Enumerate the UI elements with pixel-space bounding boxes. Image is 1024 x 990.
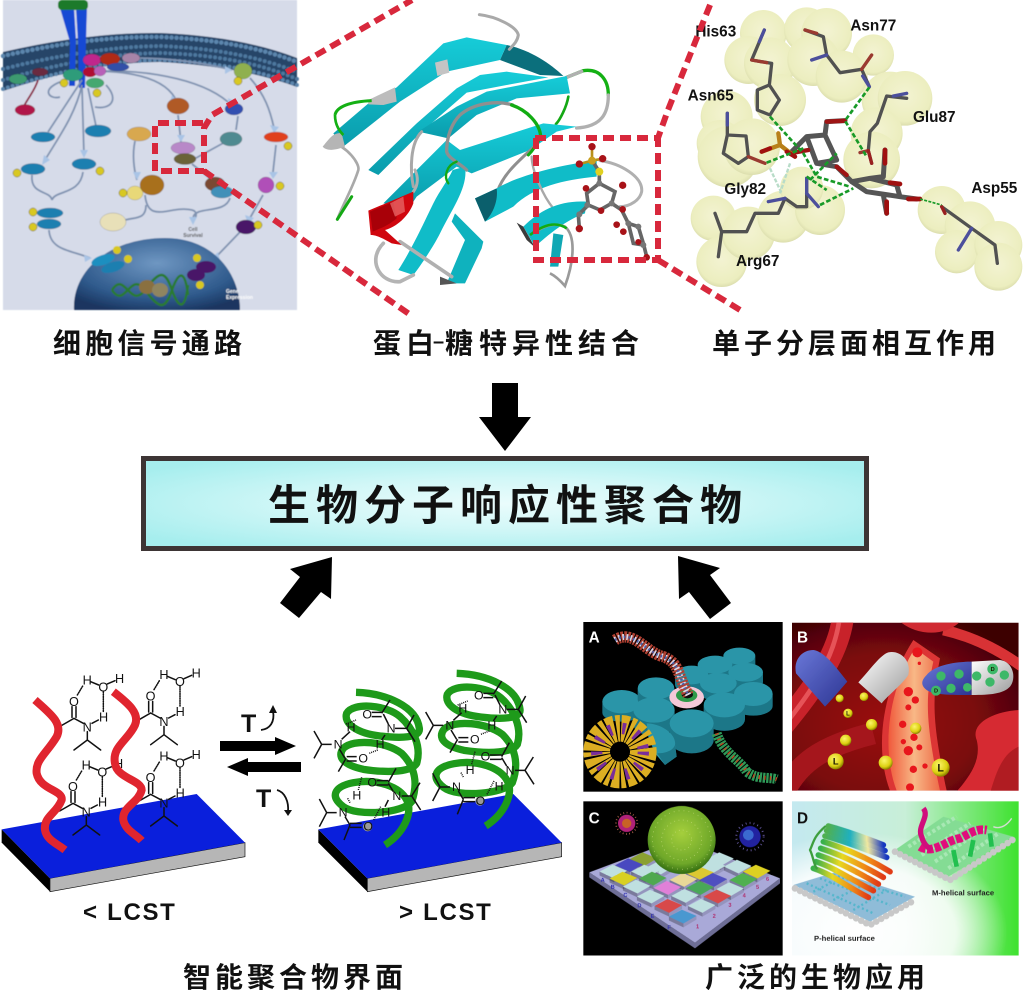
sub-panel C: microarray: B	[611, 885, 615, 891]
helix chemical groups: N	[339, 806, 348, 820]
hydrated chemical groups: H	[159, 749, 168, 763]
connector: pathway to protein magnification	[155, 0, 745, 316]
helix 2 lower chemical groups: H	[495, 780, 504, 794]
beta strand B	[368, 72, 548, 175]
hydrated chemical groups: H	[192, 748, 201, 762]
beta strand D	[383, 123, 577, 207]
sub-panel D: helical surfaces	[792, 801, 1019, 955]
title box: 生物分子响应性聚合物	[268, 482, 748, 529]
hydrated chemical groups: H	[98, 795, 107, 809]
caption: protein sugar binding: 蛋白	[373, 328, 434, 359]
sub-panel C: microarray: D	[637, 903, 641, 909]
residue labels: Asp55	[971, 180, 1018, 197]
caption: protein sugar binding: –	[433, 331, 444, 353]
hydrated chemical groups: O	[98, 680, 108, 694]
sub-panel C: microarray: 5	[756, 885, 759, 891]
green helix chains	[335, 673, 520, 845]
hydrated chemical groups: H	[176, 786, 185, 800]
hydrated chemical groups: H	[99, 710, 108, 724]
sub-panel B: capsule drug delivery: B	[797, 630, 808, 647]
sub-panel C: microarray: 6	[766, 877, 769, 883]
pale contacts	[770, 163, 790, 193]
cell membrane	[3, 33, 297, 91]
hydrated chemical groups: N	[83, 720, 92, 734]
helix 1 terminal oxygen: O	[363, 820, 373, 834]
panel: protein-sugar binding ribbon	[323, 15, 650, 286]
P-helical surface	[793, 826, 915, 925]
sub-panel D: helical surfaces: M-helical surface	[932, 888, 994, 897]
equilibrium arrows	[220, 705, 301, 816]
sub-panel C: microarray	[583, 801, 783, 955]
hydrated chemical groups: H	[115, 672, 124, 686]
sub-panel C: microarray: E	[651, 914, 655, 920]
arrow: up right into title	[280, 557, 332, 618]
hydrated chemical groups: H	[159, 668, 168, 682]
sub-panel B: capsule drug delivery: D	[934, 689, 938, 695]
substrate	[318, 794, 562, 892]
equilibrium arrows: T	[256, 785, 271, 813]
panel: smart polymer below LCST	[2, 667, 245, 892]
label: cell survival: Survival	[183, 233, 203, 239]
sugar ligand	[762, 121, 920, 213]
receptor	[58, 0, 88, 88]
label: above LCST: > LCST	[399, 899, 493, 926]
beta strand A	[323, 37, 507, 150]
sub-panel B: capsule drug delivery: L	[833, 757, 839, 767]
sub-panel C: microarray: 2	[713, 914, 716, 920]
helix 2 lower chemical groups: O	[476, 794, 485, 808]
label: cell survival: Cell	[188, 227, 198, 233]
ligand atoms	[576, 143, 650, 261]
label: gene expression: Gene	[226, 289, 239, 295]
helix 2 chemical groups: N	[498, 702, 507, 716]
helix chemical groups: H	[376, 737, 385, 751]
equilibrium arrows: T	[241, 710, 256, 738]
arrowheads	[42, 66, 279, 262]
helix 2 chemical groups	[426, 681, 527, 753]
nucleus	[74, 238, 240, 310]
helix 2 chemical groups: O	[474, 688, 484, 702]
beta strand F	[447, 213, 483, 283]
helix chemical groups: N	[387, 721, 396, 735]
residue labels: Asn77	[850, 17, 896, 34]
helix 2 lower chemical groups	[433, 743, 534, 814]
gray tail	[532, 157, 642, 208]
panel: smart polymer above LCST	[314, 673, 562, 892]
caption: monolayer interaction: 单子分层面相互作用	[712, 328, 1000, 359]
ligand sticks	[578, 160, 647, 257]
residue labels: Arg67	[736, 253, 779, 270]
hydrated chemical groups: H	[176, 705, 185, 719]
M-helical surface	[895, 808, 1015, 880]
panel: cell signaling pathway	[3, 0, 297, 310]
label: below LCST: < LCST	[83, 899, 177, 926]
helix 2 chemical groups: H	[487, 718, 496, 732]
panel: monolayer interaction	[688, 7, 1022, 291]
sub-panel C: microarray: 1	[696, 924, 699, 930]
van der waals spheres	[691, 7, 1022, 291]
helix chemical groups: N	[392, 789, 401, 803]
hydrated chemical groups: O	[68, 780, 78, 794]
sub-panel C: microarray: 4	[743, 893, 747, 899]
beta strand C	[418, 76, 570, 138]
title box	[144, 458, 866, 548]
helix chemical groups: H	[352, 789, 361, 803]
gray and green loops	[376, 103, 541, 282]
hydrated chemical groups: O	[175, 756, 185, 770]
phosphate badges	[13, 77, 292, 231]
sub-panel C: microarray: A	[601, 878, 605, 884]
hydrated chemical groups: H	[83, 673, 92, 687]
hydrogen bonds	[767, 87, 942, 205]
sub-panel C: microarray: 3	[728, 903, 731, 909]
sub-panel C: microarray: F	[667, 925, 671, 931]
helix chemical groups: O	[362, 707, 372, 721]
helix chemical groups: O	[367, 775, 377, 789]
sub-panel D: helical surfaces: P-helical surface	[814, 934, 875, 943]
arrow: up left into title	[678, 556, 731, 619]
hydrated chemical groups: H	[192, 667, 201, 681]
helix 2 chemical groups: H	[458, 701, 467, 715]
arrow: down to title	[479, 383, 531, 451]
hydrated chemical groups: H	[82, 758, 91, 772]
hydrated chemical groups: N	[159, 715, 168, 729]
residue labels: Gly82	[724, 181, 766, 198]
caption: protein sugar binding: 糖特异性结合	[445, 328, 639, 359]
substrate	[2, 794, 245, 892]
helix 2 lower chemical groups: N	[506, 763, 515, 777]
pathway connectors	[24, 58, 276, 298]
hydrated chemical groups: O	[146, 690, 156, 704]
hydrated chemical groups: H	[114, 757, 123, 771]
helix chemical groups: O	[358, 751, 368, 765]
sub-panel B: capsule drug delivery: D	[991, 667, 995, 673]
residue labels: Asn65	[688, 88, 734, 105]
hydrated chemical groups: N	[159, 796, 168, 810]
residue labels	[688, 17, 1018, 270]
helix chemical groups	[314, 700, 421, 840]
helix chemical groups: H	[347, 720, 356, 734]
sub-panel A: nanopore: A	[589, 630, 600, 647]
sub-panel B: capsule drug delivery: L	[937, 762, 944, 774]
back strand and loops	[333, 15, 608, 219]
red helix	[368, 192, 413, 245]
hydrated chemical groups: O	[69, 695, 79, 709]
beta strand G	[475, 161, 597, 222]
caption: cell signaling: 细胞信号通路	[53, 328, 246, 359]
sub-panel B: capsule drug delivery: L	[846, 712, 850, 718]
sub-panel B: capsule drug delivery	[792, 622, 1019, 791]
hydrated chemical groups: O	[97, 765, 107, 779]
helix 2 chemical groups: O	[470, 732, 480, 746]
sub-panel A: nanopore	[583, 622, 783, 792]
beta strand E	[398, 167, 465, 275]
sub-panel D: helical surfaces: D	[797, 810, 808, 827]
residue labels: His63	[695, 24, 736, 41]
hydrated chemical groups: N	[82, 805, 91, 819]
hydrated chemical groups: O	[146, 771, 156, 785]
helix 2 chemical groups: N	[445, 718, 454, 732]
panel group: bio applications	[583, 613, 1024, 955]
helix 2 lower chemical groups: H	[466, 763, 475, 777]
sub-panel C: microarray: C	[589, 810, 600, 827]
label: gene expression: Expression	[226, 295, 253, 301]
sub-panel C: microarray: C	[623, 893, 627, 899]
helix 2 lower chemical groups: N	[452, 780, 461, 794]
residue sticks	[715, 30, 997, 263]
residue labels: Glu87	[913, 109, 956, 126]
red extended polymer chains	[35, 692, 142, 850]
helix 2 lower chemical groups: O	[481, 750, 490, 764]
beta strand H	[517, 201, 587, 286]
hydrated chemical groups: O	[175, 675, 185, 689]
hydrated chemical groups	[60, 667, 201, 835]
helix chemical groups: N	[334, 737, 343, 751]
signaling proteins	[9, 53, 288, 234]
helix chemical groups: H	[381, 805, 390, 819]
